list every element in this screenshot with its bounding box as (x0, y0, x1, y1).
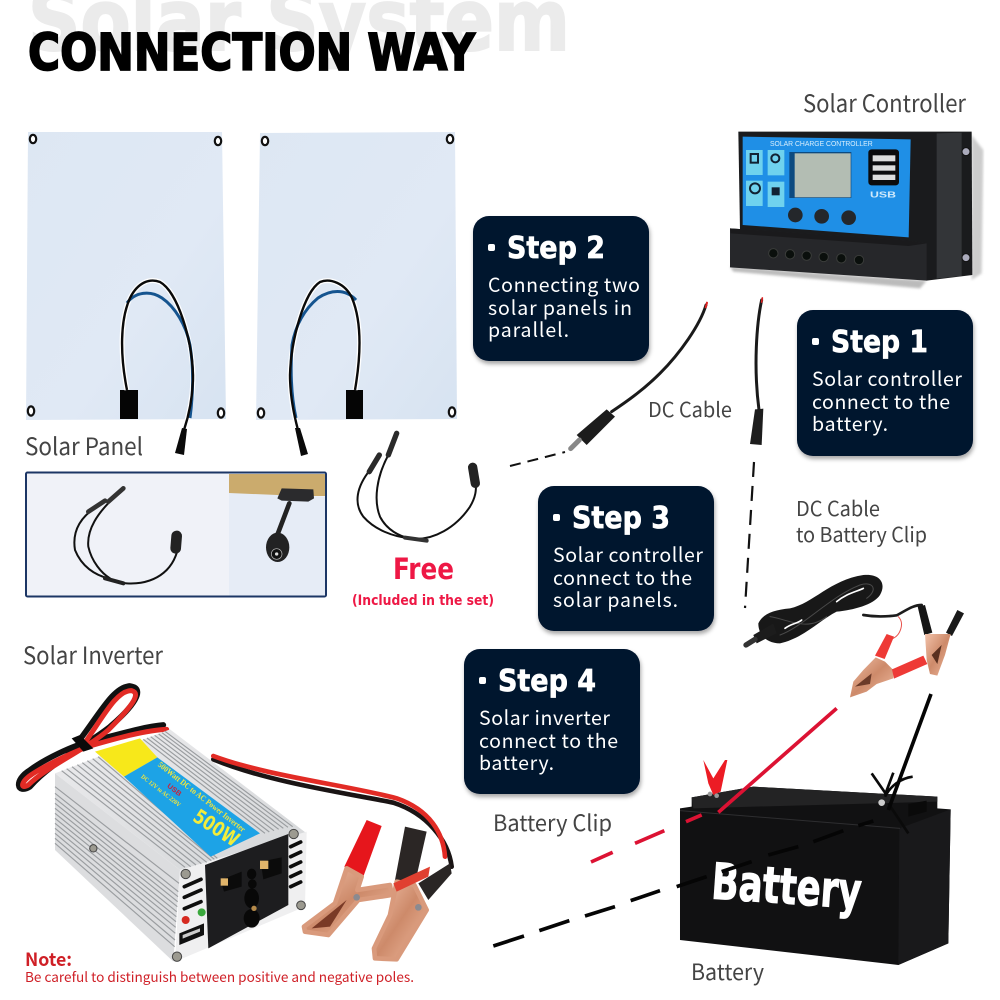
dashed connector: splitter to DC cable (510, 452, 565, 466)
negative connection line: black (493, 694, 931, 946)
solar controller device (730, 132, 983, 288)
step 4 card: battery. (479, 747, 554, 776)
label: Battery Clip: Battery Clip (493, 806, 612, 838)
battery: Battery (710, 852, 864, 921)
inverter body (55, 729, 307, 870)
step 3 card: Solar controller (553, 539, 703, 568)
free label: Free (393, 552, 454, 586)
label: DC Cable: DC Cable (648, 393, 732, 423)
inverter label: yellow and blue sticker: 500W (189, 804, 244, 851)
solar inverter device (19, 686, 452, 962)
step 3 card: solar panels. (553, 584, 678, 613)
photo box: splitter cable and DC plug (26, 472, 326, 596)
DC cable with plug (571, 303, 707, 449)
step 2 card (473, 216, 649, 361)
battery terminal clips (703, 760, 913, 833)
dashed connector: socket to battery clip (745, 462, 754, 608)
title: CONNECTION WAY (28, 24, 476, 83)
step 2 card: Step 2 (507, 231, 605, 266)
inverter label: yellow and blue sticker: USB (165, 783, 182, 798)
solar panel 1 (26, 132, 226, 455)
inverter battery clips (304, 820, 452, 959)
splitter cable: free accessory (358, 433, 476, 541)
inverter vents, LEDs, USB and screws (90, 829, 305, 961)
step 3 card: connect to the (553, 562, 692, 591)
label: DC Cable to Battery Clip: DC Cable (796, 492, 880, 522)
label: Solar Panel: Solar Panel (25, 427, 143, 462)
step 4 card: Step 4 (498, 664, 596, 699)
step 1 card: connect to the (812, 386, 950, 415)
step 1 card (797, 310, 973, 456)
positive connection line: red (591, 708, 837, 862)
step 1 card: Solar controller (812, 363, 962, 392)
note: Note: (25, 946, 72, 972)
step 4 card (464, 649, 640, 794)
step 1 card: battery. (812, 408, 888, 437)
battery (680, 760, 951, 965)
inverter label: yellow and blue sticker: DC 12V to AC 220V (139, 773, 182, 809)
label: Solar Inverter: Solar Inverter (23, 636, 164, 671)
solar controller device: USB (870, 190, 896, 199)
solar controller label: Solar Controller (803, 84, 967, 119)
step 3 card: Step 3 (572, 501, 670, 536)
label: DC Cable to Battery Clip: to Battery Clip (796, 518, 927, 548)
inverter label: yellow and blue sticker (95, 738, 260, 857)
inverter long cable (213, 756, 452, 867)
note (25, 946, 414, 986)
step 2 card: Connecting two (488, 269, 640, 298)
step 4 card: connect to the (479, 725, 618, 754)
step 3 card (538, 486, 714, 631)
step 4 card: Solar inverter (479, 702, 610, 731)
step 1 card: Step 1 (831, 325, 928, 360)
solar panel 2 (256, 132, 457, 456)
note: Be careful to distinguish between positive and negative poles. (25, 966, 414, 986)
solar controller device: SOLAR CHARGE CONTROLLER (770, 141, 873, 148)
inverter label: yellow and blue sticker: 500Watt DC to AC Power Inverter (156, 760, 247, 834)
DC cable to battery clip device (746, 575, 964, 697)
step 2 card: solar panels in (488, 292, 632, 321)
label: Battery: Battery (691, 955, 764, 987)
free label (352, 552, 494, 609)
label: DC Cable to Battery Clip (796, 492, 927, 548)
DC cable with socket (750, 298, 763, 445)
step 2 card: parallel. (488, 314, 569, 343)
inverter socket plate (205, 834, 288, 948)
free label: (Included in the set) (352, 593, 494, 609)
inverter cable loop (19, 686, 167, 789)
